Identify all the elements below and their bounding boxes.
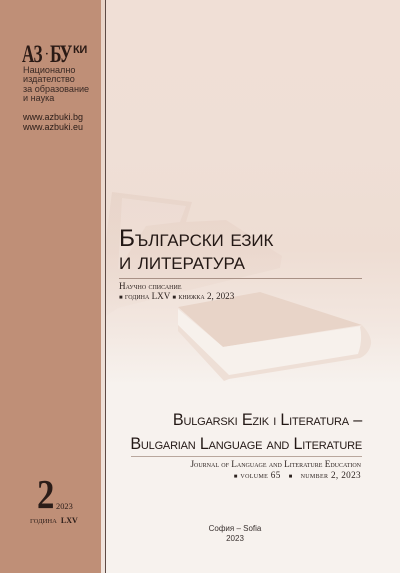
Bulgarian title [119, 225, 274, 275]
publication place and year [209, 524, 262, 543]
publication place and year: 2023 [226, 534, 244, 543]
English title: Bulgarian Language and Literature [130, 435, 362, 453]
publisher name: за образование [23, 84, 89, 94]
rule [131, 456, 362, 457]
publisher name: и наука [23, 93, 54, 103]
English title: Bulgarski Ezik i Literatura – [173, 411, 362, 429]
rule [119, 278, 362, 279]
English title [130, 411, 362, 453]
issue number: 2 [37, 471, 54, 517]
logo: Аз Буки: · [45, 48, 49, 60]
volume year label: ГОДИНА LXV [30, 516, 78, 525]
publisher name: издателство [23, 74, 75, 84]
sidebar light strip [101, 0, 105, 573]
sidebar vertical line [105, 0, 106, 573]
publication place and year: София – Sofia [209, 524, 261, 533]
website links: www.azbuki.eu [23, 122, 83, 132]
Bulgarian title: и литература [119, 248, 245, 275]
Bulgarian subtitle: Научно списание [119, 281, 182, 291]
logo: Аз Буки [22, 41, 87, 68]
website links: www.azbuki.bg [23, 112, 83, 122]
logo: Аз Буки: КИ [73, 44, 87, 56]
Bulgarian title: Български език [119, 225, 273, 252]
Bulgarian subtitle [119, 281, 234, 301]
English subtitle: Journal of Language and Literature Education [190, 459, 361, 469]
logo: Аз Буки: АЗ [22, 41, 42, 68]
English subtitle [190, 459, 361, 480]
English subtitle: ■ volume 65 ■ number 2, 2023 [234, 470, 361, 480]
publisher name: Национално [23, 65, 75, 75]
background gradient panel [106, 0, 400, 573]
website links [23, 112, 83, 132]
issue year: 2023 [56, 502, 73, 511]
sidebar panel [0, 0, 101, 573]
logo: Аз Буки: БУ [50, 41, 71, 68]
publisher name [23, 65, 89, 103]
Bulgarian subtitle: ■ година LXV ■ книжка 2, 2023 [119, 291, 234, 301]
